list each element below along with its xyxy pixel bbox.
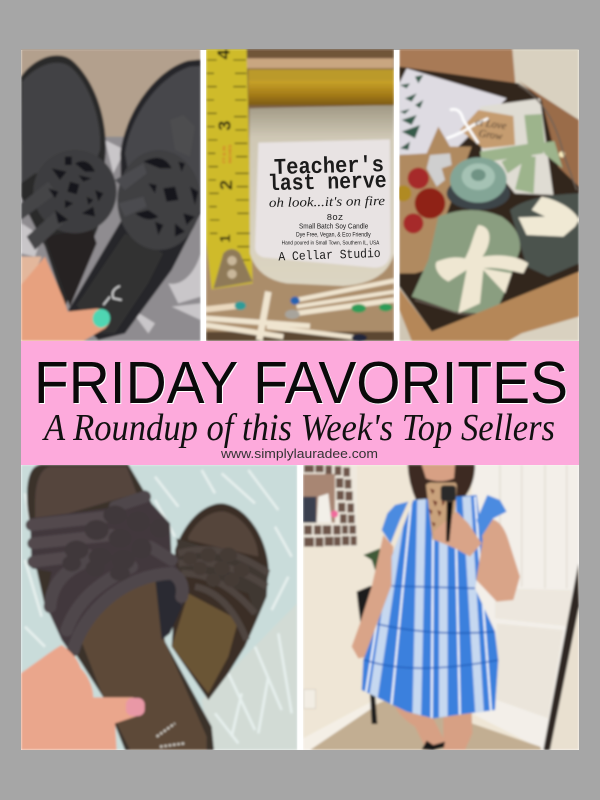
- right sandal medallion: [115, 150, 201, 250]
- kraft gift tag: et Love: [475, 117, 507, 132]
- dark knit socks: [510, 193, 579, 277]
- website url: www.simplylauradee.com: [220, 446, 378, 461]
- cream ribbons: [436, 197, 579, 313]
- script logo on insole: [103, 286, 122, 305]
- candle jar: [249, 105, 394, 286]
- photo: teacher's last nerve candle: [206, 49, 394, 341]
- fairy lights: [415, 85, 577, 319]
- mirror side wall: [550, 607, 579, 750]
- teal fingernail: [91, 307, 112, 330]
- door: [472, 465, 579, 750]
- leopard phone: [426, 483, 457, 540]
- kraft paper and chocolates: [395, 127, 472, 273]
- left sandal sole: [21, 55, 106, 307]
- tape measure: [206, 49, 253, 289]
- hair: [408, 465, 475, 505]
- candle label text: Hand poured in Small Town, Southern IL, USA: [282, 240, 380, 246]
- photo: mirror selfie in blue dress: [303, 465, 579, 750]
- box lid: [399, 49, 516, 85]
- right arm: [463, 519, 520, 602]
- left arm: [352, 535, 393, 658]
- mirror frame: [543, 563, 579, 750]
- candle label text: Teacher's: [274, 152, 384, 181]
- hand holding sandal: [21, 257, 110, 341]
- left sandal footbed: [27, 465, 214, 750]
- sage ribbon bow: [480, 114, 563, 193]
- right ruffle sleeve: [477, 495, 507, 537]
- sandal straps: [422, 741, 445, 750]
- photo: gift box: [395, 49, 579, 341]
- left sandal medallion: [21, 150, 117, 250]
- right sandal sole: [68, 59, 201, 340]
- left ruffle sleeve: [382, 502, 408, 543]
- tape measure: FT & IN: [221, 145, 227, 163]
- white wrapped gift: [480, 98, 553, 195]
- box front flap: [399, 272, 579, 341]
- pink fingernail: [126, 698, 145, 716]
- side table: [357, 586, 377, 724]
- kraft gift tag: Grow: [478, 129, 504, 143]
- tape measure: 4: [213, 49, 233, 59]
- kraft gift tag: [447, 109, 515, 148]
- plant: [363, 548, 382, 570]
- candle label backing: [255, 139, 391, 268]
- photo: black medallion sandals: [21, 49, 201, 341]
- tape measure: 1: [218, 235, 234, 243]
- tape measure: 2: [216, 180, 236, 190]
- gold lid: [247, 80, 394, 106]
- box interior: [399, 67, 579, 332]
- candle label text: last nerve: [268, 168, 387, 197]
- subtitle: A Roundup of this Week's Top Sellers: [41, 407, 555, 449]
- candle label text: oh look...it's on fire: [269, 193, 385, 210]
- candle label text: 8oz: [327, 212, 343, 223]
- tape measure: 3: [215, 121, 235, 131]
- matches: [206, 281, 394, 341]
- left sandal knotted straps: [30, 490, 187, 657]
- hand on phone: [433, 512, 482, 557]
- candle label text: Dye Free, Vegan, & Eco Friendly: [296, 232, 371, 239]
- legs: [393, 697, 472, 750]
- photo collage on wall: [303, 465, 357, 547]
- hand holding sandal: [21, 645, 143, 750]
- sage knit blanket roll: [412, 210, 520, 315]
- tape measure: INCHES: [227, 144, 233, 163]
- candle label text: A Cellar Studio: [278, 246, 381, 264]
- photo: knotted brown slide sandals: [21, 465, 297, 750]
- face: [422, 465, 455, 481]
- brand text on insole: [157, 723, 185, 747]
- title: friday favorites: FRIDAY FAVORITES: [34, 350, 568, 416]
- pink title banner: [21, 341, 579, 465]
- wall outlet: [304, 689, 316, 709]
- blue tiered dress: [362, 495, 507, 720]
- phone strap: [446, 502, 453, 542]
- candle label text: Small Batch Soy Candle: [299, 222, 368, 231]
- succulent in tin: [447, 157, 510, 210]
- right sandal: [172, 503, 269, 700]
- banner background: [21, 341, 579, 465]
- greeting card with eucalyptus: [399, 68, 507, 155]
- carpet and baseboard: [310, 697, 542, 750]
- candle label text: [268, 152, 387, 264]
